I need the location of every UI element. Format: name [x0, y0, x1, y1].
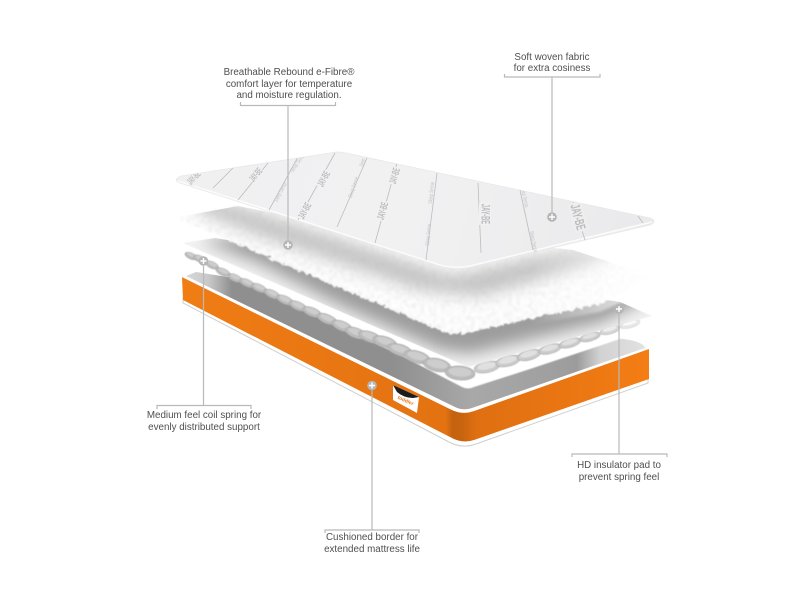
sheet woven pattern: JAY-BE [296, 201, 314, 221]
e-Fibre comfort layer [188, 206, 622, 336]
sheet woven pattern: JAY-BE [184, 168, 203, 187]
grey interior top [186, 272, 645, 409]
bracket and leader [504, 74, 600, 212]
coil row: short side [473, 318, 641, 375]
coil row: long side [184, 251, 476, 381]
bracket and leader [325, 390, 419, 533]
callout text: comfort layer for temperature [226, 79, 353, 90]
sheet woven pattern: Sleep Sense [347, 176, 361, 199]
callout text: Medium feel coil spring for [147, 410, 262, 421]
HD insulator pad [185, 238, 650, 366]
marker [367, 381, 377, 390]
sheet woven pattern: JAY-BE [246, 165, 265, 184]
marker [283, 240, 293, 250]
sheet woven pattern: JAY-BE [375, 200, 391, 221]
pad shadow under fibre layer [200, 220, 650, 354]
white plate below the coils [185, 254, 655, 388]
sheet woven pattern: Sleep Sense [427, 181, 436, 204]
sheet woven pattern: JAY-BE [567, 203, 588, 232]
marker [199, 256, 208, 266]
callout text: and moisture regulation. [236, 90, 342, 101]
fibre fade on right [530, 235, 660, 325]
orange border side [182, 277, 649, 441]
tag brand name: toddler [396, 395, 414, 407]
callout text: extended mattress life [324, 544, 420, 555]
white top rim [182, 272, 649, 413]
tag black header [393, 385, 419, 398]
callout text: for extra cosiness [514, 63, 590, 74]
callout text: HD insulator pad to [577, 460, 661, 471]
bracket and leader [240, 102, 336, 240]
callout: medium feel coil spring [147, 256, 262, 433]
callout text: prevent spring feel [579, 472, 659, 483]
sheet woven pattern: Sleep [358, 158, 366, 167]
mattress label tag [393, 385, 419, 413]
callout: breathable rebound e-fibre [224, 67, 355, 250]
coil spring layer [184, 251, 641, 381]
tag card [393, 385, 419, 413]
marker [547, 212, 557, 222]
bracket and leader [157, 266, 251, 409]
callout: cushioned border [324, 381, 420, 555]
bracket and leader [572, 314, 667, 457]
callout text: evenly distributed support [148, 422, 260, 433]
sheet woven pattern: Sleep Sense [518, 185, 530, 208]
callout: hd insulator pad [572, 304, 667, 483]
sheet woven pattern [184, 152, 643, 260]
soft woven fabric top sheet [176, 152, 654, 268]
callout text: Cushioned border for [326, 532, 419, 543]
callout: soft woven fabric [504, 52, 600, 222]
sheet woven pattern: Sleep Sense [424, 223, 433, 246]
base white underside [183, 298, 648, 446]
callout text: Breathable Rebound e-Fibre® [224, 67, 355, 78]
marker [614, 304, 624, 314]
callout text: Soft woven fabric [514, 52, 590, 63]
mattress base [182, 272, 649, 446]
sheet woven pattern: JAY-BE [315, 169, 333, 189]
sheet woven pattern: Sleep Sense [527, 230, 539, 253]
sheet woven pattern: Sleep Sense [273, 181, 289, 204]
sheet white front rim [178, 181, 652, 267]
sheet woven pattern: JAY-BE [387, 167, 403, 185]
fibre shadow beneath sheet [194, 206, 606, 304]
sheet woven pattern: JAY-BE [479, 204, 493, 224]
sheet woven pattern: Sleep Sense [289, 152, 307, 174]
